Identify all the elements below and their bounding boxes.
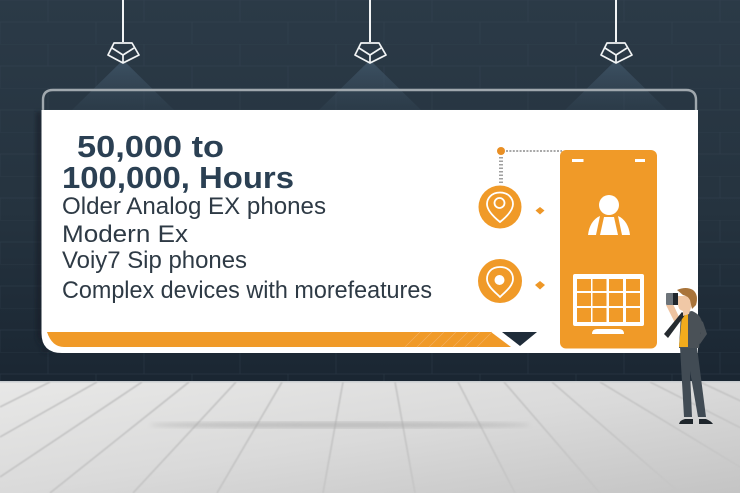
person with camera <box>664 288 713 424</box>
text list: Modern Ex <box>62 221 188 248</box>
orange footer bar <box>47 332 511 347</box>
light beam left <box>72 60 174 110</box>
hair <box>677 288 697 309</box>
brick wall background <box>0 0 740 383</box>
torso <box>679 311 702 348</box>
light beam right <box>565 60 667 110</box>
camera <box>666 293 678 305</box>
small connector mark 2 <box>535 281 545 290</box>
white panel <box>42 110 698 353</box>
strap <box>664 312 685 338</box>
vest <box>679 314 688 347</box>
title: 50,000 to <box>77 129 224 164</box>
text list: Voiy7 Sip phones <box>62 247 247 274</box>
light beam centre <box>319 60 421 110</box>
text list <box>62 193 432 304</box>
neck and face <box>678 296 692 316</box>
right arm <box>695 316 707 344</box>
shoes <box>679 419 713 424</box>
connector dotted line <box>497 147 562 185</box>
icon: person <box>588 195 630 235</box>
text list: Complex devices with morefeatures <box>62 277 432 304</box>
text list: Older Analog EX phones <box>62 193 326 220</box>
icon: location pin 1 <box>478 186 522 228</box>
dark triangle marker <box>502 332 537 346</box>
lamp left <box>108 0 139 63</box>
icon: location pin 2 <box>478 259 522 303</box>
floor <box>0 381 740 493</box>
lamp right <box>601 0 632 63</box>
panel shadow <box>36 112 60 352</box>
legs <box>680 347 706 417</box>
title: 100,000, Hours <box>62 160 294 195</box>
small connector mark 1 <box>536 207 544 214</box>
title <box>62 129 294 195</box>
panel frame <box>43 90 696 110</box>
icon: monitor with grid <box>573 274 644 334</box>
raised forearm <box>666 304 680 325</box>
lamp centre <box>355 0 386 63</box>
orange phone <box>560 150 657 348</box>
